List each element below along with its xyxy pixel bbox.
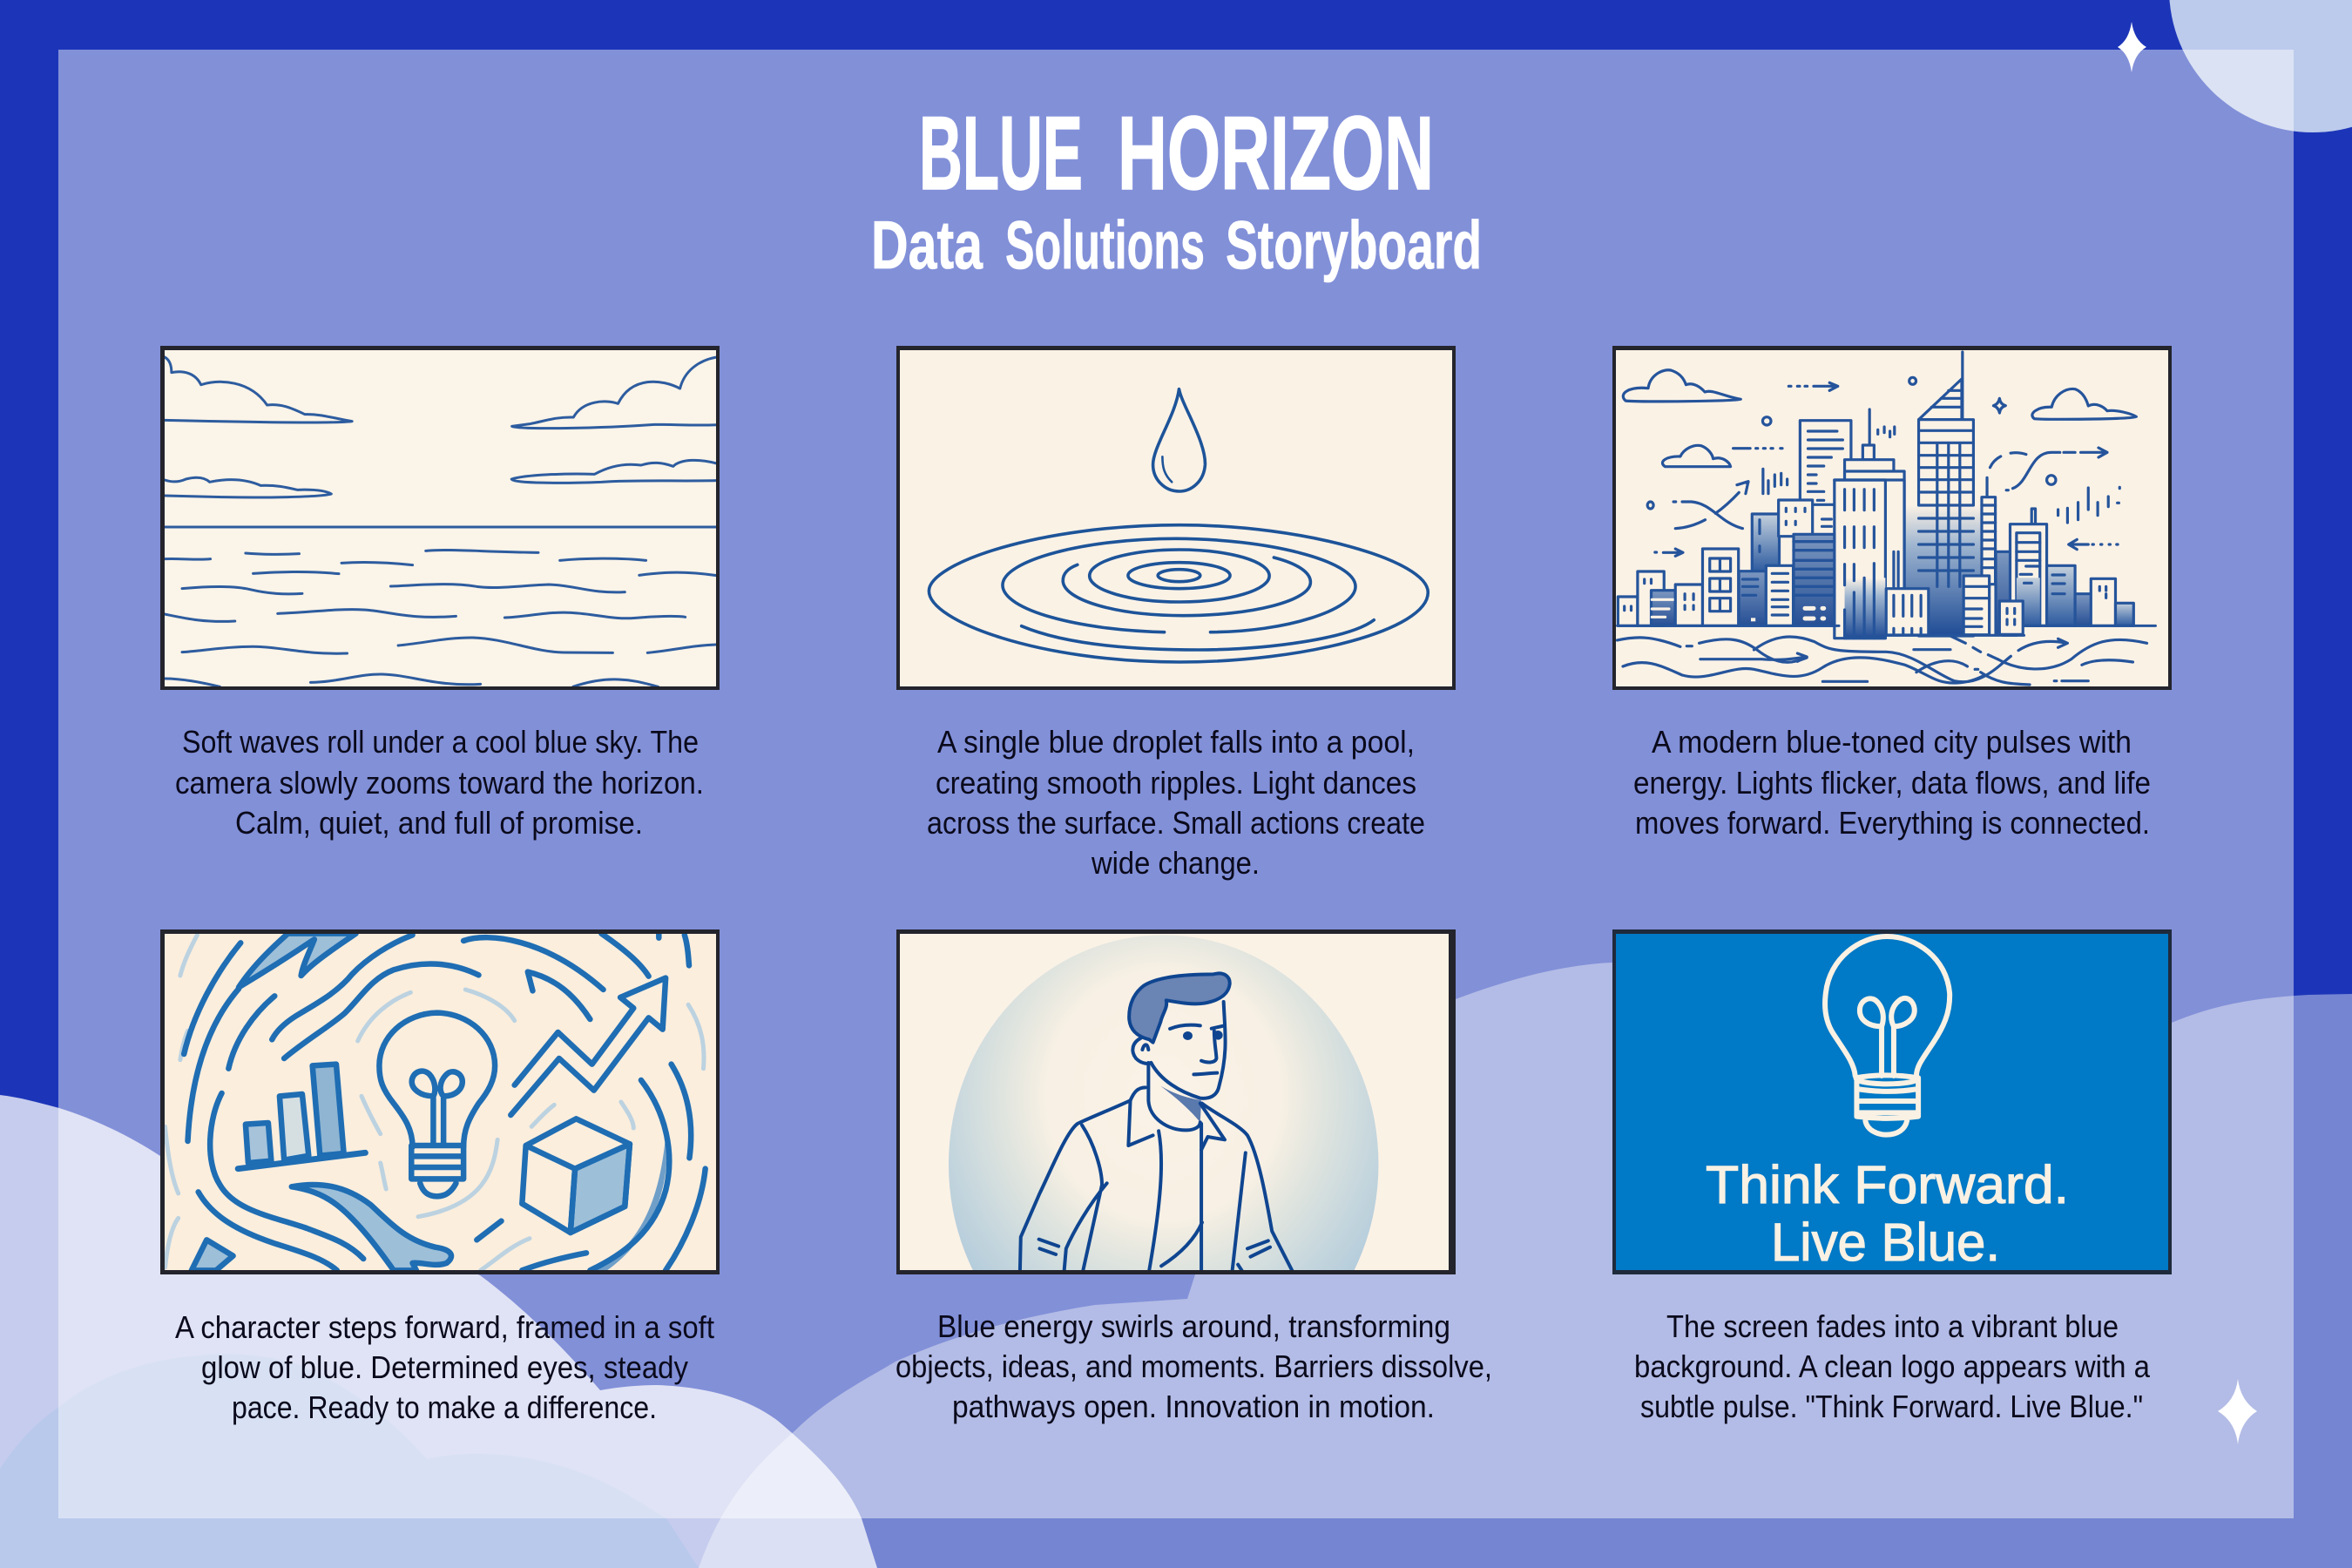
illustration: man framed in blue glow: [900, 934, 1449, 1270]
data streams: [1617, 638, 1807, 662]
illustration: data city skyline: [1616, 350, 2168, 686]
logo text: [1706, 1155, 2069, 1272]
icon: light bulb: [379, 1013, 495, 1147]
icon: sparkle top right: [2118, 22, 2146, 72]
image frame: logo: [1612, 929, 2172, 1274]
title: [919, 95, 1434, 212]
hair: [1129, 973, 1230, 1043]
caption: scene 3: moves forward. Everything is connected.: [1635, 805, 2150, 841]
caption: scene 6: [1634, 1308, 2151, 1424]
logo text: Live Blue.: [1771, 1213, 2000, 1272]
neck shadow: [1160, 1086, 1201, 1122]
caption: scene 4: glow of blue. Determined eyes, steady: [201, 1349, 688, 1385]
buildings back layer: [1961, 352, 1963, 420]
decorative blob: periwinkle hill bottom right: [699, 963, 2352, 1568]
ribbons: [239, 934, 356, 987]
caption: scene 4: [175, 1309, 714, 1425]
decorative circle: top right: [2169, 0, 2352, 132]
caption: scene 6: background. A clean logo appears with a: [1634, 1348, 2151, 1384]
caption: scene 3: energy. Lights flicker, data flows, and life: [1633, 765, 2151, 801]
title: HORIZON: [1118, 95, 1434, 212]
image frame: swirl: [160, 929, 720, 1274]
image frame: character: [896, 929, 1456, 1274]
icon: rising arrow: [510, 978, 666, 1115]
caption: scene 3: A modern blue-toned city pulses with: [1652, 724, 2132, 760]
ground line: [1617, 625, 2155, 627]
panel: scene 3 city: [1612, 346, 2172, 841]
caption: scene 1: Calm, quiet, and full of promise.: [235, 805, 643, 841]
illustration: droplet and ripples: [900, 350, 1452, 686]
caption: scene 2: creating smooth ripples. Light dances: [936, 765, 1416, 801]
subtitle: Data: [871, 206, 983, 283]
caption: scene 3: [1633, 724, 2151, 841]
panel: scene 6 logo: [1612, 929, 2172, 1424]
caption: scene 1: Soft waves roll under a cool blue sky. The: [182, 724, 699, 760]
neck and collar: [1148, 1063, 1200, 1130]
caption: scene 2: across the surface. Small actions create: [927, 805, 1425, 841]
faint swirl strokes: [166, 935, 704, 1270]
decorative blob: pale cloud bottom left: [0, 1095, 877, 1568]
face: [1151, 1002, 1226, 1098]
caption: scene 2: [927, 724, 1425, 881]
decorative blob: inner pale blue cloud: [0, 1354, 699, 1568]
caption: scene 5: objects, ideas, and moments. Barriers dissolve,: [896, 1348, 1492, 1384]
caption: scene 1: camera slowly zooms toward the horizon.: [175, 765, 704, 801]
caption: scene 6: subtle pulse. "Think Forward. Live Blue.": [1640, 1389, 2143, 1424]
panel: scene 2 droplet: [896, 346, 1456, 881]
caption: scene 5: Blue energy swirls around, transforming: [937, 1308, 1450, 1344]
caption: scene 5: pathways open. Innovation in motion.: [952, 1389, 1435, 1424]
swirl lines: [184, 943, 240, 1054]
icon: sparkle bottom right: [2218, 1379, 2257, 1444]
icon: cube: [571, 1144, 630, 1233]
caption: scene 1: [175, 724, 704, 841]
subtitle: Storyboard: [1226, 206, 1482, 283]
buildings right: [1985, 477, 1989, 497]
illustration: swirling lines with icons: [165, 934, 716, 1270]
jacket: [1020, 1100, 1131, 1270]
subtitle: Solutions: [1005, 206, 1205, 283]
caption: scene 6: The screen fades into a vibrant blue: [1666, 1308, 2119, 1344]
caption: scene 5: [896, 1308, 1492, 1424]
icon: light bulb logo: [1825, 936, 1950, 1135]
image frame: waves: [160, 346, 720, 690]
caption: scene 2: A single blue droplet falls into a pool,: [937, 724, 1415, 760]
caption: scene 4: pace. Ready to make a difference.: [232, 1389, 657, 1425]
illustration: sea and clouds: [165, 350, 717, 686]
image frame: droplet: [896, 346, 1456, 690]
icon: bar chart: [246, 1123, 271, 1163]
title: BLUE: [919, 95, 1083, 212]
caption: scene 4: A character steps forward, framed in a soft: [175, 1309, 714, 1345]
panel: scene 5 character: [896, 929, 1492, 1424]
buildings left: [1618, 597, 1638, 625]
glow oval: [949, 936, 1378, 1270]
clouds: [1623, 370, 1740, 402]
panel: scene 1 waves: [160, 346, 720, 841]
logo text: Think Forward.: [1706, 1155, 2069, 1214]
data arrows: [1788, 382, 1838, 390]
caption: scene 2: wide change.: [1091, 845, 1260, 881]
subtitle: [871, 206, 1482, 283]
image frame: city: [1612, 346, 2172, 690]
illustration: logo on vibrant blue: [1616, 934, 2168, 1272]
panel: scene 4 energy swirl: [160, 929, 720, 1425]
